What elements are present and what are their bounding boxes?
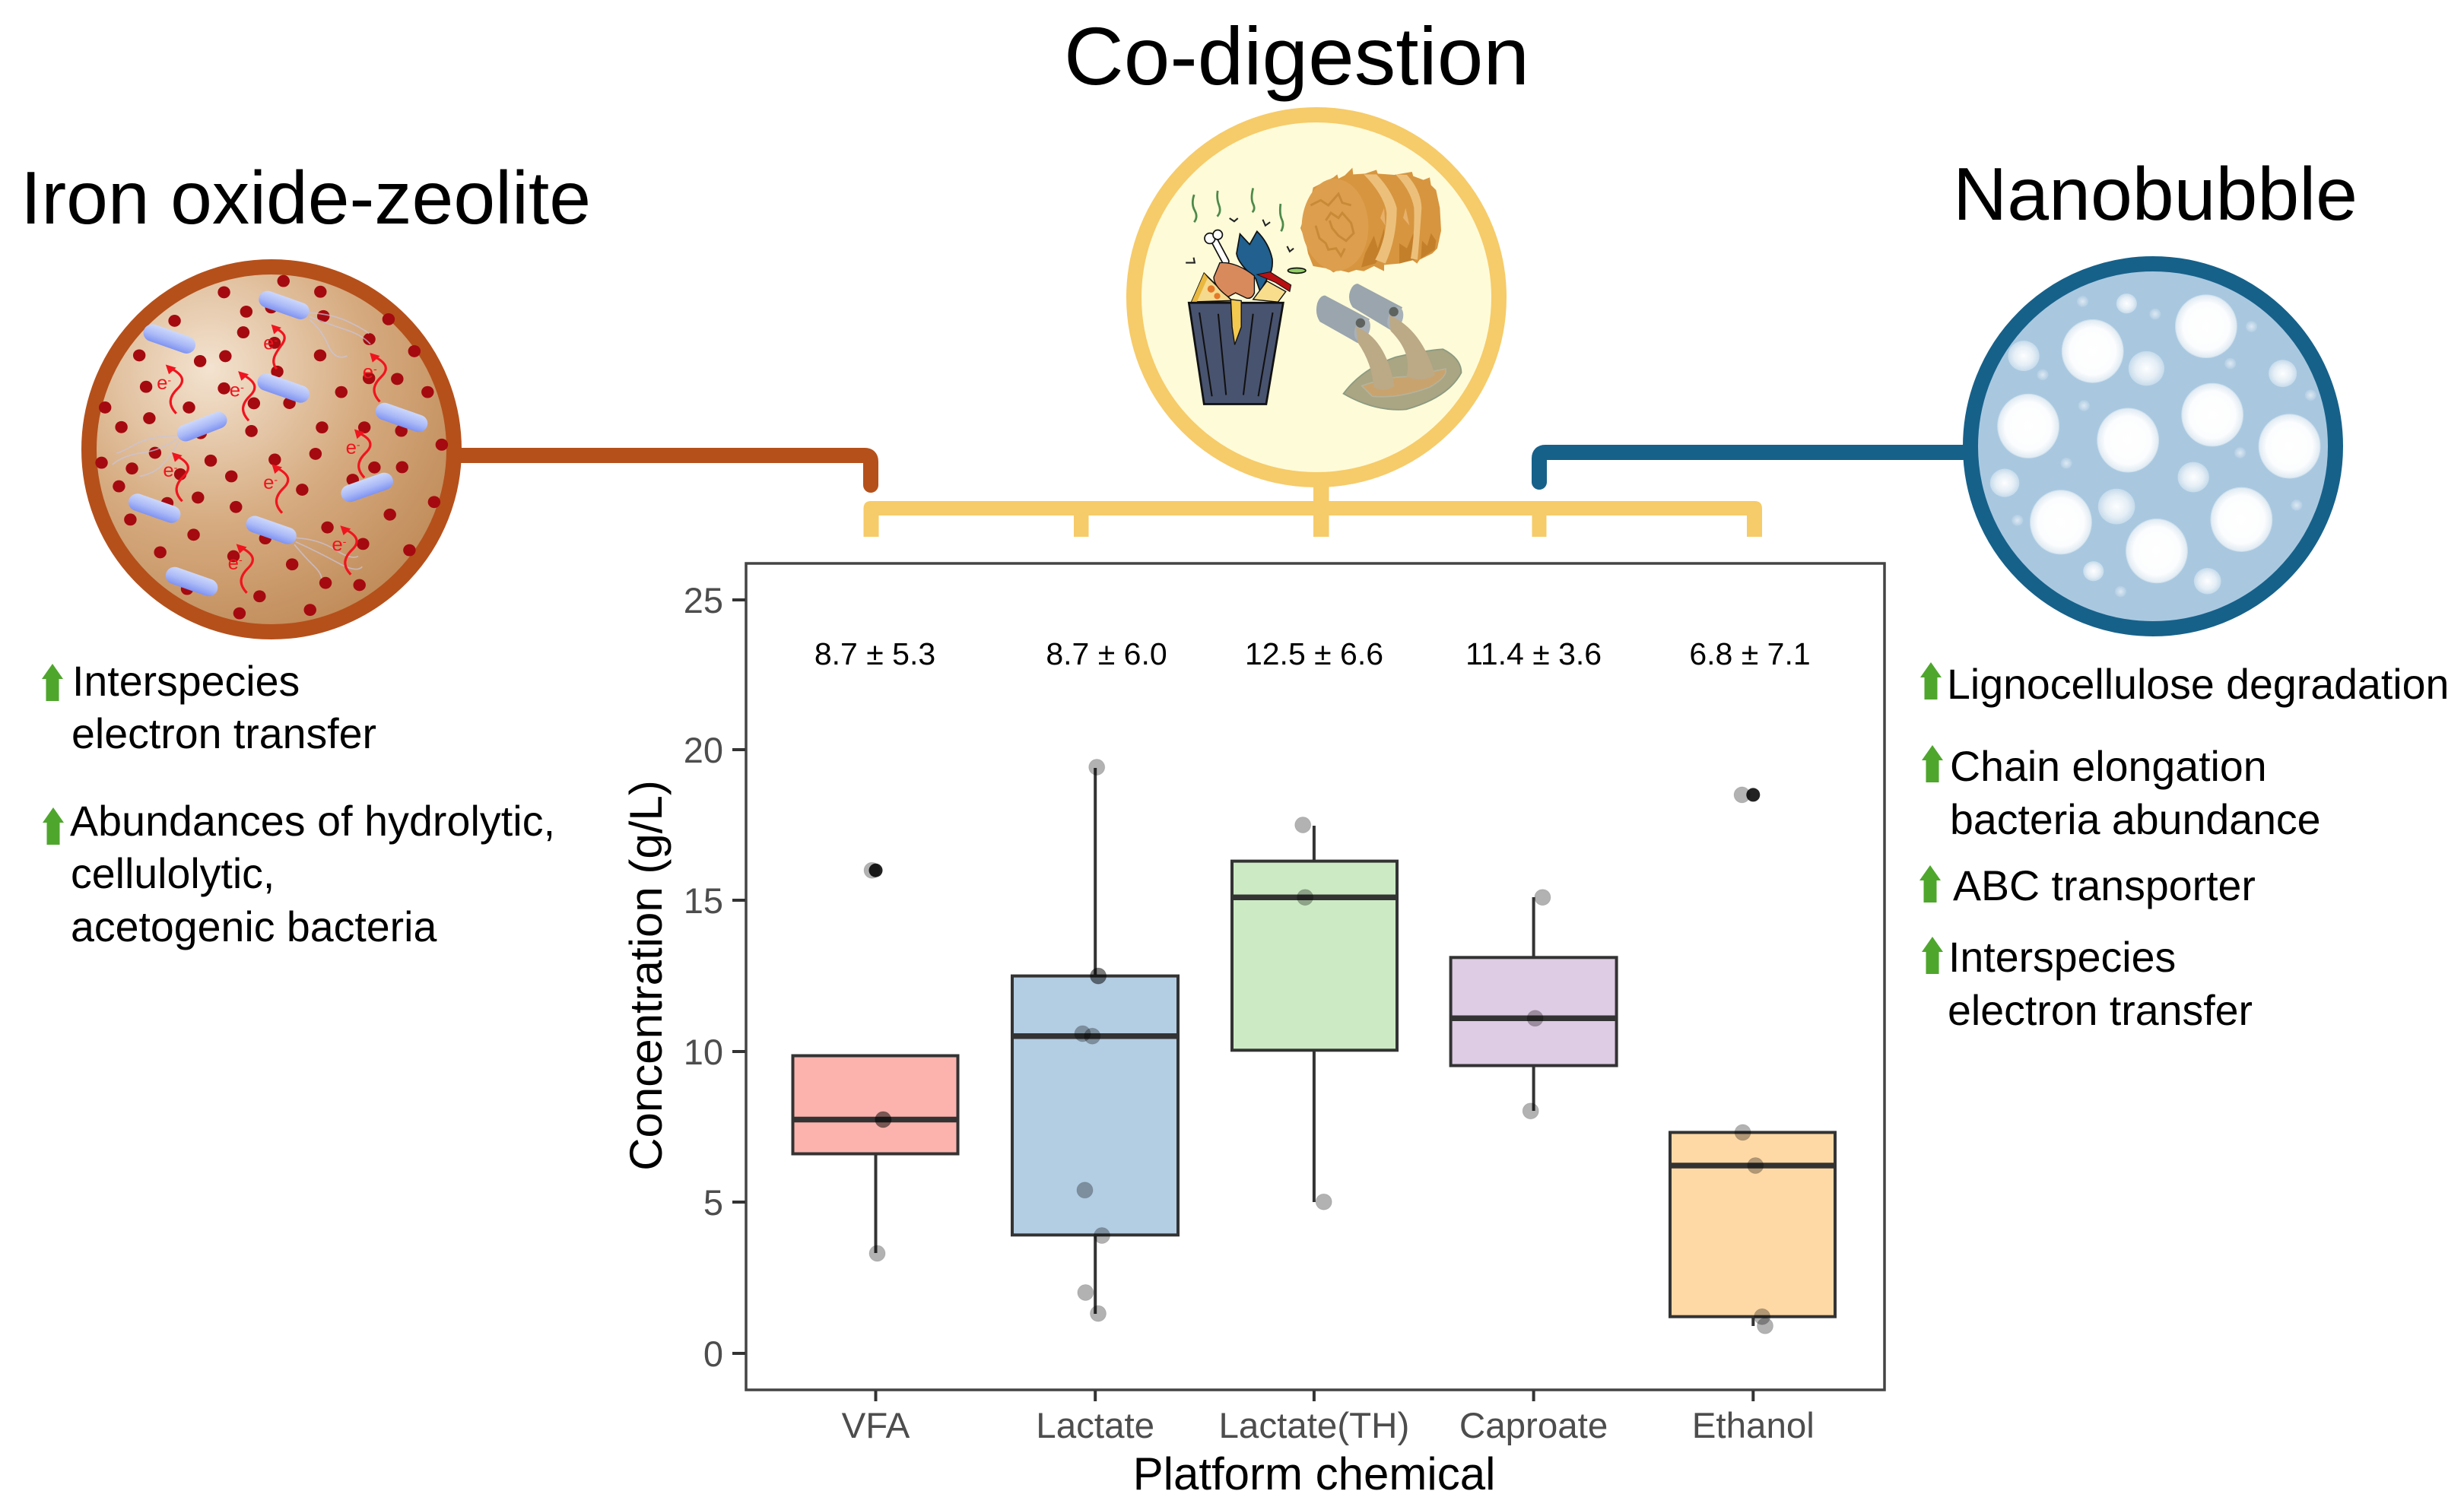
y axis tick labels: 20 (684, 730, 723, 770)
electron labels: - (239, 554, 243, 566)
icon: up arrow (1919, 865, 1941, 903)
item: bacteria abundances (70, 798, 555, 950)
item: ABC transporter: ABC transporter (1953, 862, 2256, 909)
y axis ticks (732, 600, 745, 1353)
item: bacteria abundances: Abundances of hydrolytic, (70, 798, 555, 845)
mean and SD annotations: 12.5 ± 6.6 (1245, 636, 1383, 671)
item: interspecies electron transfer (1948, 934, 2253, 1034)
electron labels: - (174, 462, 178, 474)
icon: up arrow (43, 807, 64, 845)
y axis tick labels: 25 (684, 580, 723, 620)
electron labels: - (343, 535, 347, 547)
y axis tick labels: 15 (684, 880, 723, 921)
title: Iron oxide-zeolite: Iron oxide-zeolite (21, 156, 591, 240)
item: bacteria abundances: acetogenic bacteria (71, 903, 437, 950)
large bubbles (1998, 295, 2320, 583)
electron labels: - (167, 374, 172, 386)
item: interspecies electron transfer: Interspecies (1948, 934, 2176, 981)
electron labels: - (274, 334, 278, 346)
text block: iron oxide-zeolite effects (42, 658, 555, 950)
mean and SD annotations: 8.7 ± 5.3 (814, 636, 935, 671)
x axis title: Platform chemical (1133, 1448, 1495, 1499)
y axis title: Concentration (g/L) (621, 780, 672, 1171)
bacteria (126, 288, 430, 598)
bubbles (1990, 293, 2320, 597)
item: lignocellulose degradation: Lignocellulose degradation (1947, 661, 2449, 708)
electron labels: - (357, 439, 360, 451)
medium bubbles (1990, 293, 2297, 594)
icon: up arrow (1922, 937, 1943, 974)
title: Co-digestion: Co-digestion (1064, 10, 1529, 102)
icon: up arrow (42, 664, 63, 701)
circle background (1970, 264, 2335, 629)
mean and SD annotations: 8.7 ± 6.0 (1046, 636, 1167, 671)
item: interspecies electron transfer (71, 658, 376, 757)
icon: up arrow (1920, 662, 1942, 699)
electron labels: e (228, 553, 239, 574)
x axis tick labels: VFA (842, 1406, 910, 1446)
mean and SD annotations: 11.4 ± 3.6 (1465, 636, 1602, 671)
electron labels: - (274, 474, 278, 485)
iron oxide particles (95, 275, 448, 620)
electron labels: e (157, 373, 167, 394)
x axis tick labels: Lactate(TH) (1219, 1406, 1409, 1446)
circle background (89, 267, 454, 632)
connector: co-digestion bracket (864, 484, 1762, 537)
y axis tick labels: 5 (703, 1182, 723, 1223)
item: chain elongation bacteria abundance: Chain elongation (1950, 743, 2267, 790)
panel: iron oxide-zeolite circle (89, 267, 454, 632)
electron labels (157, 333, 377, 574)
panel: nanobubble circle (1970, 264, 2335, 629)
icon: hay bale (1300, 168, 1441, 272)
electron labels: e (363, 362, 373, 382)
icon: wastewater pipes (1316, 284, 1461, 410)
mean and SD annotations (814, 636, 1811, 671)
item: interspecies electron transfer: electron transfer (1948, 987, 2253, 1034)
electron arrowheads (166, 325, 379, 554)
y axis tick labels: 0 (703, 1334, 723, 1374)
connector: iron oxide to plot (456, 455, 871, 485)
chart: box plot of platform chemical concentrations (621, 563, 1885, 1499)
item: chain elongation bacteria abundance: bacteria abundance (1950, 796, 2321, 843)
small bubbles (2012, 296, 2316, 597)
box: Lactate (TH) (1232, 826, 1397, 1202)
circle background (1134, 115, 1499, 480)
icon: food waste bin (1186, 188, 1306, 404)
electron labels: e (346, 438, 357, 458)
x axis tick labels: Lactate (1036, 1406, 1154, 1446)
item: interspecies electron transfer: Interspecies (72, 658, 300, 705)
y axis tick labels (684, 580, 723, 1374)
feedstock icons (1186, 168, 1461, 410)
title: Nanobubble: Nanobubble (1953, 152, 2358, 236)
x axis ticks (876, 1391, 1753, 1401)
plot panel (746, 563, 1885, 1390)
box: Lactate (1012, 768, 1178, 1314)
electron labels: e (163, 461, 174, 481)
electron labels: e (263, 333, 274, 354)
box: Ethanol (1670, 788, 1835, 1326)
connector: nanobubble to plot (1539, 452, 1970, 482)
x axis tick labels: Caproate (1459, 1406, 1608, 1446)
electron labels: - (373, 363, 377, 375)
mean and SD annotations: 6.8 ± 7.1 (1689, 636, 1811, 671)
flagella (113, 312, 370, 579)
icon: up arrow (1922, 745, 1943, 782)
x axis tick labels: Ethanol (1692, 1406, 1815, 1446)
item: chain elongation bacteria abundance (1950, 743, 2321, 843)
electron labels: e (263, 472, 274, 493)
jittered data points (864, 759, 1773, 1334)
y axis tick labels: 10 (684, 1032, 723, 1072)
electron labels: e (332, 535, 343, 556)
electron labels: - (240, 381, 244, 393)
panel: co-digestion circle (1134, 115, 1499, 480)
item: bacteria abundances: cellulolytic, (71, 850, 275, 897)
iron oxide particles, bacteria and electron arrows (95, 275, 448, 620)
item: interspecies electron transfer: electron transfer (71, 710, 376, 757)
electron transfer arrows (170, 328, 386, 593)
electron labels: e (230, 380, 240, 401)
box: Caproate (1451, 897, 1617, 1111)
x axis tick labels (842, 1406, 1815, 1446)
text block: nanobubble effects (1919, 661, 2449, 1034)
box: VFA (792, 864, 958, 1253)
